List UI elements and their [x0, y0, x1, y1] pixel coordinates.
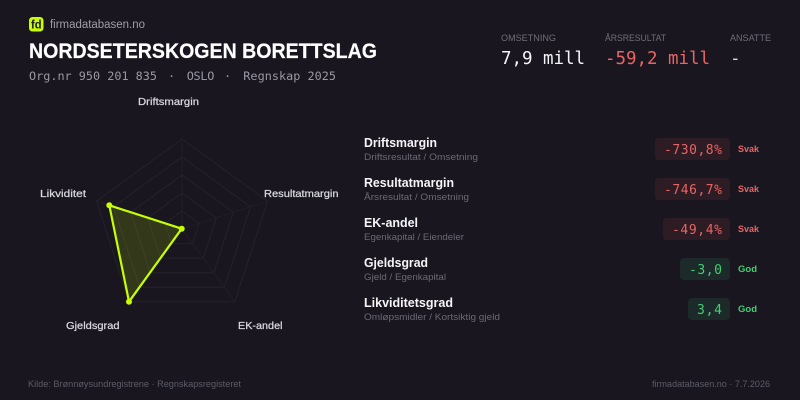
- subtitle: org number, location, year: OSLO: [187, 69, 214, 83]
- stat: årsresultat: ÅRSRESULTAT: [605, 33, 666, 43]
- subtitle: org number, location, year: [29, 69, 336, 83]
- stat: omsetning: [501, 33, 585, 69]
- stat: årsresultat: [605, 33, 710, 69]
- metric row: resultatmargin: Svak: [738, 184, 760, 195]
- metric row: resultatmargin: Årsresultat / Omsetning: [364, 192, 469, 203]
- radar axis labels: [40, 96, 339, 332]
- brand name: firmadatabasen.no: [50, 19, 145, 31]
- metric row: gjeldsgrad: God: [738, 264, 757, 275]
- subtitle: org number, location, year: Regnskap 2025: [243, 69, 336, 83]
- metric row: gjeldsgrad: Gjeld / Egenkapital: [364, 272, 446, 283]
- metric row: ek-andel: EK-andel: [364, 215, 418, 230]
- metric row: likviditetsgrad: God: [738, 304, 757, 315]
- metric row: likviditetsgrad: [364, 295, 757, 323]
- metric row: gjeldsgrad: [364, 255, 757, 283]
- metric row: likviditetsgrad: 3,4: [697, 303, 722, 318]
- stat: ansatte: ANSATTE: [730, 33, 771, 43]
- metric row: driftsmargin: Driftsresultat / Omsetning: [364, 152, 478, 163]
- subtitle: org number, location, year: ·: [168, 69, 175, 83]
- radar axis labels: Resultatmargin: [264, 188, 339, 200]
- metric row: resultatmargin: Resultatmargin: [364, 175, 454, 190]
- icon: fd logo: fd: [31, 18, 42, 32]
- radar chart: [40, 96, 339, 332]
- metric row: driftsmargin: -730,8%: [664, 143, 722, 158]
- radar axis labels: EK-andel: [238, 320, 282, 332]
- title: NORDSETERSKOGEN BORETTSLAG: [29, 40, 377, 63]
- subtitle: org number, location, year: Org.nr 950 201 835: [29, 69, 157, 83]
- footer: source: Kilde: Brønnøysundregistrene · Regnskapsregisteret: [28, 379, 241, 389]
- stat: ansatte: -: [730, 49, 741, 69]
- metric row: ek-andel: -49,4%: [672, 223, 722, 238]
- footer: site and date: firmadatabasen.no · 7.7.2026: [652, 379, 770, 389]
- radar data polygon: [109, 205, 182, 302]
- header: brand logo and name: [29, 17, 145, 32]
- metric row: driftsmargin: Driftsmargin: [364, 135, 437, 150]
- metric row: driftsmargin: [364, 135, 760, 163]
- metric row: likviditetsgrad: Likviditetsgrad: [364, 295, 453, 310]
- metric row: driftsmargin: Svak: [738, 144, 760, 155]
- metric row: ek-andel: [364, 215, 760, 243]
- metric row: resultatmargin: [364, 175, 760, 203]
- radar data points: [106, 202, 185, 305]
- metric row: likviditetsgrad: Omløpsmidler / Kortsiktig gjeld: [364, 312, 500, 323]
- stat: omsetning: 7,9 mill: [501, 49, 585, 69]
- subtitle: org number, location, year: ·: [224, 69, 231, 83]
- metric row: ek-andel: Egenkapital / Eiendeler: [364, 232, 464, 243]
- radar axis labels: Likviditet: [40, 188, 86, 200]
- metric row: gjeldsgrad: -3,0: [689, 263, 722, 278]
- metric row: resultatmargin: -746,7%: [664, 183, 722, 198]
- metric row: ek-andel: Svak: [738, 224, 760, 235]
- radar axis labels: Driftsmargin: [138, 96, 199, 108]
- stat: omsetning: OMSETNING: [501, 33, 556, 43]
- stat: ansatte: [730, 33, 771, 69]
- radar axis labels: Gjeldsgrad: [66, 320, 120, 332]
- stat: årsresultat: -59,2 mill: [605, 49, 710, 69]
- metric row: gjeldsgrad: Gjeldsgrad: [364, 255, 428, 270]
